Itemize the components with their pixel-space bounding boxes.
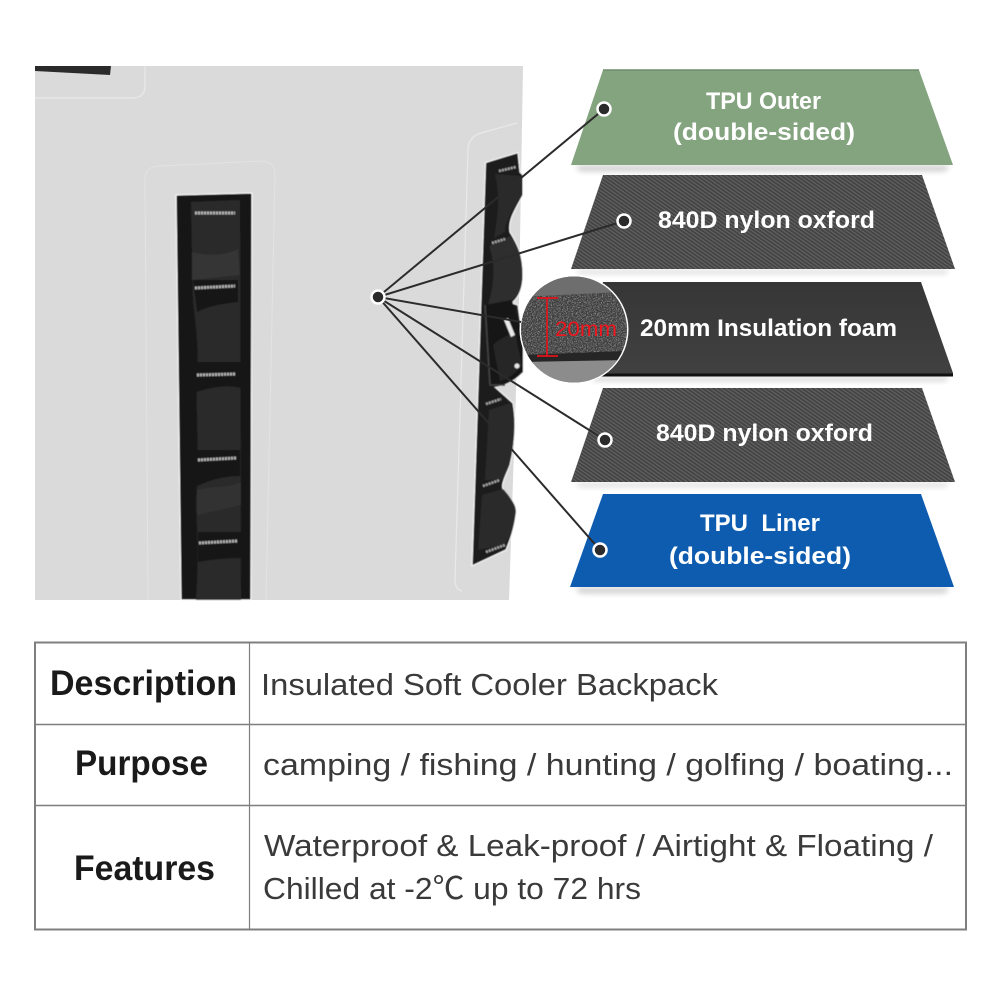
marker: TPU outer bbox=[598, 102, 610, 116]
row: description: Insulated Soft Cooler Backpack bbox=[261, 667, 719, 702]
seam: centre patch bbox=[145, 161, 275, 600]
panel: TPU Outer layer bbox=[571, 70, 953, 171]
row: description bbox=[50, 664, 719, 703]
row: features: Chilled at -2℃ up to 72 hrs bbox=[263, 871, 641, 906]
panel: 840D nylon oxford top layer bbox=[571, 175, 955, 274]
row: purpose: camping / fishing / hunting / golfing / boating... bbox=[263, 747, 953, 782]
strap: side webbing with pockets bbox=[472, 152, 523, 566]
panel: 20mm insulation foam layer bbox=[571, 282, 953, 381]
marker: nylon top bbox=[618, 214, 630, 228]
label bbox=[673, 88, 855, 146]
row: purpose bbox=[75, 744, 953, 783]
panel: cooler bag photo bbox=[35, 66, 523, 600]
label: (double-sided) bbox=[669, 543, 851, 570]
label: (double-sided) bbox=[673, 119, 855, 146]
callout: leader lines and markers bbox=[372, 102, 630, 556]
dimension mark bbox=[537, 298, 558, 356]
label: 840D nylon oxford bbox=[656, 420, 873, 447]
row: features bbox=[74, 828, 933, 906]
marker: nylon lower bbox=[598, 434, 612, 446]
marker: hub bbox=[372, 290, 384, 304]
seam: right patch bbox=[455, 123, 517, 591]
seam: top-left patch bbox=[35, 66, 145, 98]
label: 840D nylon oxford bbox=[658, 207, 875, 234]
row: features: Waterproof & Leak-proof / Airtight & Floating / bbox=[264, 828, 933, 863]
table: product specifications bbox=[35, 642, 966, 930]
row: description: Description bbox=[50, 664, 237, 703]
callout: foam thickness lens bbox=[520, 275, 628, 384]
callout: foam thickness lens: 20mm bbox=[555, 318, 617, 341]
panel: TPU Liner layer bbox=[570, 494, 954, 593]
handle: top-left strap bbox=[35, 66, 111, 75]
label: TPU Liner bbox=[700, 510, 820, 537]
stitches bbox=[195, 213, 237, 543]
panel: 840D nylon oxford lower layer bbox=[571, 388, 955, 487]
row: features: Features bbox=[74, 849, 215, 888]
label: TPU Outer bbox=[706, 88, 821, 115]
strap: centre webbing bbox=[176, 193, 252, 600]
label bbox=[669, 510, 851, 570]
label: 20mm Insulation foam bbox=[640, 315, 897, 342]
marker: TPU liner bbox=[594, 544, 606, 556]
row: purpose: Purpose bbox=[75, 744, 208, 783]
